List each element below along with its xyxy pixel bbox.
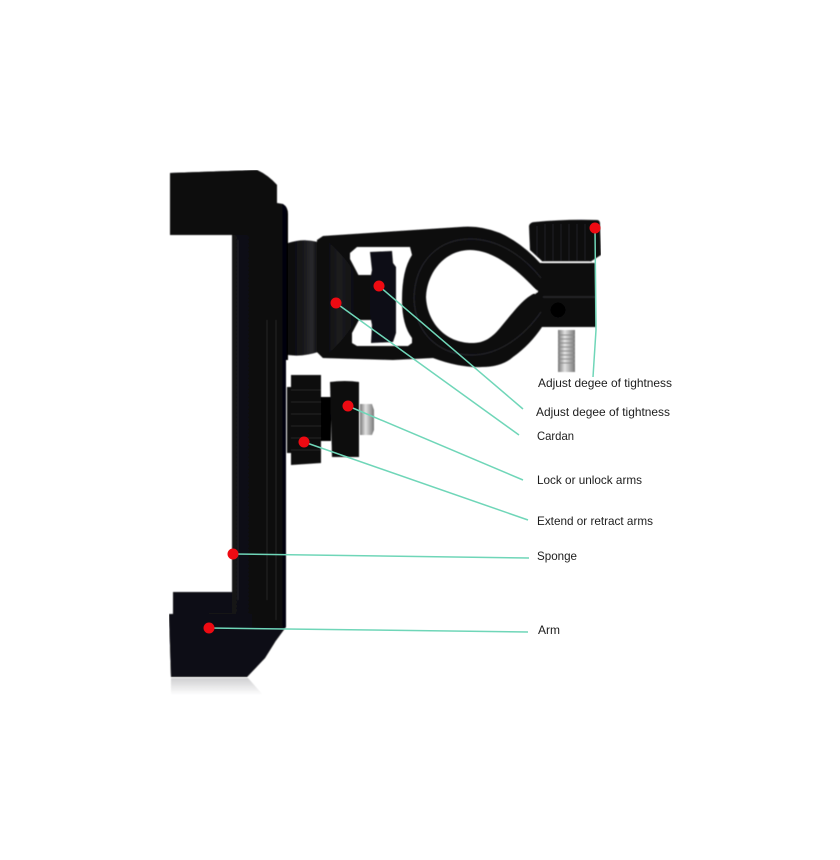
lower arm reflection <box>171 678 263 695</box>
line to lock label <box>348 406 523 480</box>
label: extend: Extend or retract arms <box>537 514 653 528</box>
lock knob <box>330 381 359 457</box>
phone holder body with upper and lower arms <box>169 170 288 695</box>
column detail <box>252 240 277 297</box>
label: sponge: Sponge <box>537 549 577 563</box>
label: arm: Arm <box>538 623 560 637</box>
part labels <box>536 376 672 637</box>
tightness knob on clamp <box>357 251 396 343</box>
line to clamp knob label <box>379 286 523 409</box>
top tightening knob <box>529 220 601 262</box>
extend knob <box>291 375 321 465</box>
leader lines <box>209 228 596 632</box>
label: lock: Lock or unlock arms <box>537 473 642 487</box>
line to arm label <box>209 628 528 632</box>
clamp bolt with thread <box>558 330 575 372</box>
red marker dots <box>204 222 600 634</box>
knob base <box>287 387 292 453</box>
steel nut <box>360 404 374 435</box>
holder artwork <box>169 170 601 695</box>
collar bulge <box>317 237 357 358</box>
swivel ball joint <box>288 240 318 356</box>
handlebar clamp <box>317 227 596 367</box>
knob shaft <box>321 397 331 441</box>
rear lip of lower arm <box>173 592 235 616</box>
clamp split gap <box>531 288 538 294</box>
line to extend label <box>304 442 528 520</box>
lower arm front <box>169 614 286 677</box>
upper arm front <box>170 170 277 235</box>
main column and arms <box>169 170 288 677</box>
clamp inner contour <box>414 239 541 355</box>
line to top knob label <box>593 228 596 377</box>
line to sponge label <box>233 554 529 558</box>
label: top knob: Adjust degee of tightness <box>538 376 672 390</box>
clamp seam and screw hole <box>543 296 595 298</box>
arm adjustment knobs <box>287 375 374 465</box>
label: cardan: Cardan <box>537 429 574 443</box>
clamp frame <box>317 227 596 367</box>
line to cardan label <box>336 303 519 435</box>
label: clamp knob: Adjust degee of tightness <box>536 405 670 419</box>
